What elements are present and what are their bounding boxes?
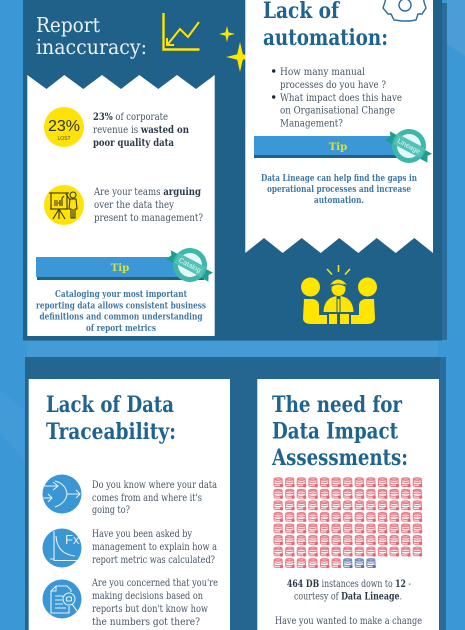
icon: formula graph: Fx [65,532,80,547]
badge: catalog [161,239,219,291]
bullet list: How many manual [280,67,365,78]
panel: data impact assessments [257,379,439,630]
badge: lineage [380,120,438,172]
heading: data impact assessments [271,392,408,471]
card: report inaccuracy white card [27,75,219,336]
tip bar: Tip [329,141,347,153]
text: lineage tip: Data Lineage can help find the gaps in [261,173,417,184]
text: data source question: comes from and where it's [92,493,202,504]
heading: lack of automation [263,0,388,51]
text: teams arguing: over the data they [94,200,174,211]
bullet list [272,67,402,130]
heading: data impact assessments: The need for [272,392,402,418]
heading: lack of data traceability [46,392,176,445]
bullet list: on Organisational Change [280,106,395,116]
text: corporate revenue: 23% of corporate [93,112,168,123]
text: lineage tip: operational processes and increase [267,184,411,195]
bullet list: What impact does this have [280,93,402,104]
panel: report inaccuracy [27,13,254,336]
text: lineage tip [261,173,417,206]
stat: 23% lost: 23% [48,118,80,135]
text: db instances: courtesy of Data Lineage. [294,592,402,602]
text: cataloging tip: Cataloging your most important [55,289,188,300]
text: metric question [92,529,217,566]
icon: document search [42,580,82,618]
badge: lineage: Lineage [396,138,421,156]
text: corporate revenue: poor quality data [93,138,174,149]
text: decisions question: the numbers got there? [92,617,200,628]
heading: lack of data traceability: Traceability: [46,419,176,445]
bullet list: processes do you have ? [280,80,386,91]
heading: report inaccuracy: Report [36,13,101,37]
icon grid: database instances [274,478,422,568]
text: cataloging tip [36,289,206,334]
text: decisions question: Are you concerned that you're [91,578,218,589]
panel: top dark background [23,0,447,340]
text: db instances [275,579,422,627]
text: decisions question: reports but don't know how [92,604,208,615]
heading: data impact assessments: Data Impact [272,418,399,444]
stat: 23% lost [44,107,84,147]
text: cataloging tip: definitions and common understanding [40,312,203,322]
icon: sparkles [219,26,254,72]
bullet list: Management? [280,118,343,130]
panel: bottom dark background [25,357,446,630]
heading: lack of data traceability: Lack of Data [46,392,174,418]
text: data source question: going to? [92,505,130,516]
text: teams arguing: present to management? [94,213,203,224]
text: metric question: report metric was calculated? [92,555,215,566]
text: corporate revenue: revenue is wasted on [93,125,190,136]
stat: 23% lost: LOST [57,136,71,142]
icon: team meeting [301,265,377,324]
text: decisions question: making decisions based on [92,591,203,602]
text: teams arguing: Are your teams arguing [93,187,201,198]
text: data source question [92,480,217,516]
text: cataloging tip: reporting data allows consistent business [36,300,206,312]
icon: gear [383,0,426,21]
tip bar [36,257,204,280]
text: lineage tip: automation. [314,195,364,206]
heading: data impact assessments: Assessments: [271,445,408,471]
icon: data flow [42,474,82,514]
text: metric question: management to explain how a [92,542,217,553]
icon: formula graph [42,528,82,568]
panel: lack of automation [245,0,438,253]
heading: lack of automation: automation: [263,25,388,51]
text: corporate revenue [93,112,190,149]
text: metric question: Have you been asked by [92,529,192,540]
text: decisions question [91,578,218,628]
tip bar: Tip [111,262,129,274]
panel: lack of data traceability [29,379,230,630]
icon: line chart [164,13,200,50]
text: cataloging tip: of report metrics [86,323,156,334]
badge: catalog: Catalog [177,257,202,275]
text: db instances: Have you wanted to make a change [275,616,422,627]
text: data source question: Do you know where your data [92,480,217,491]
tip bar [254,136,412,158]
text: teams arguing [93,187,203,224]
icon: presenter at easel [44,185,84,225]
heading: report inaccuracy: inaccuracy: [36,35,147,59]
text: db instances: 464 DB instances down to 12 - [287,579,411,590]
heading: report inaccuracy [36,13,147,59]
